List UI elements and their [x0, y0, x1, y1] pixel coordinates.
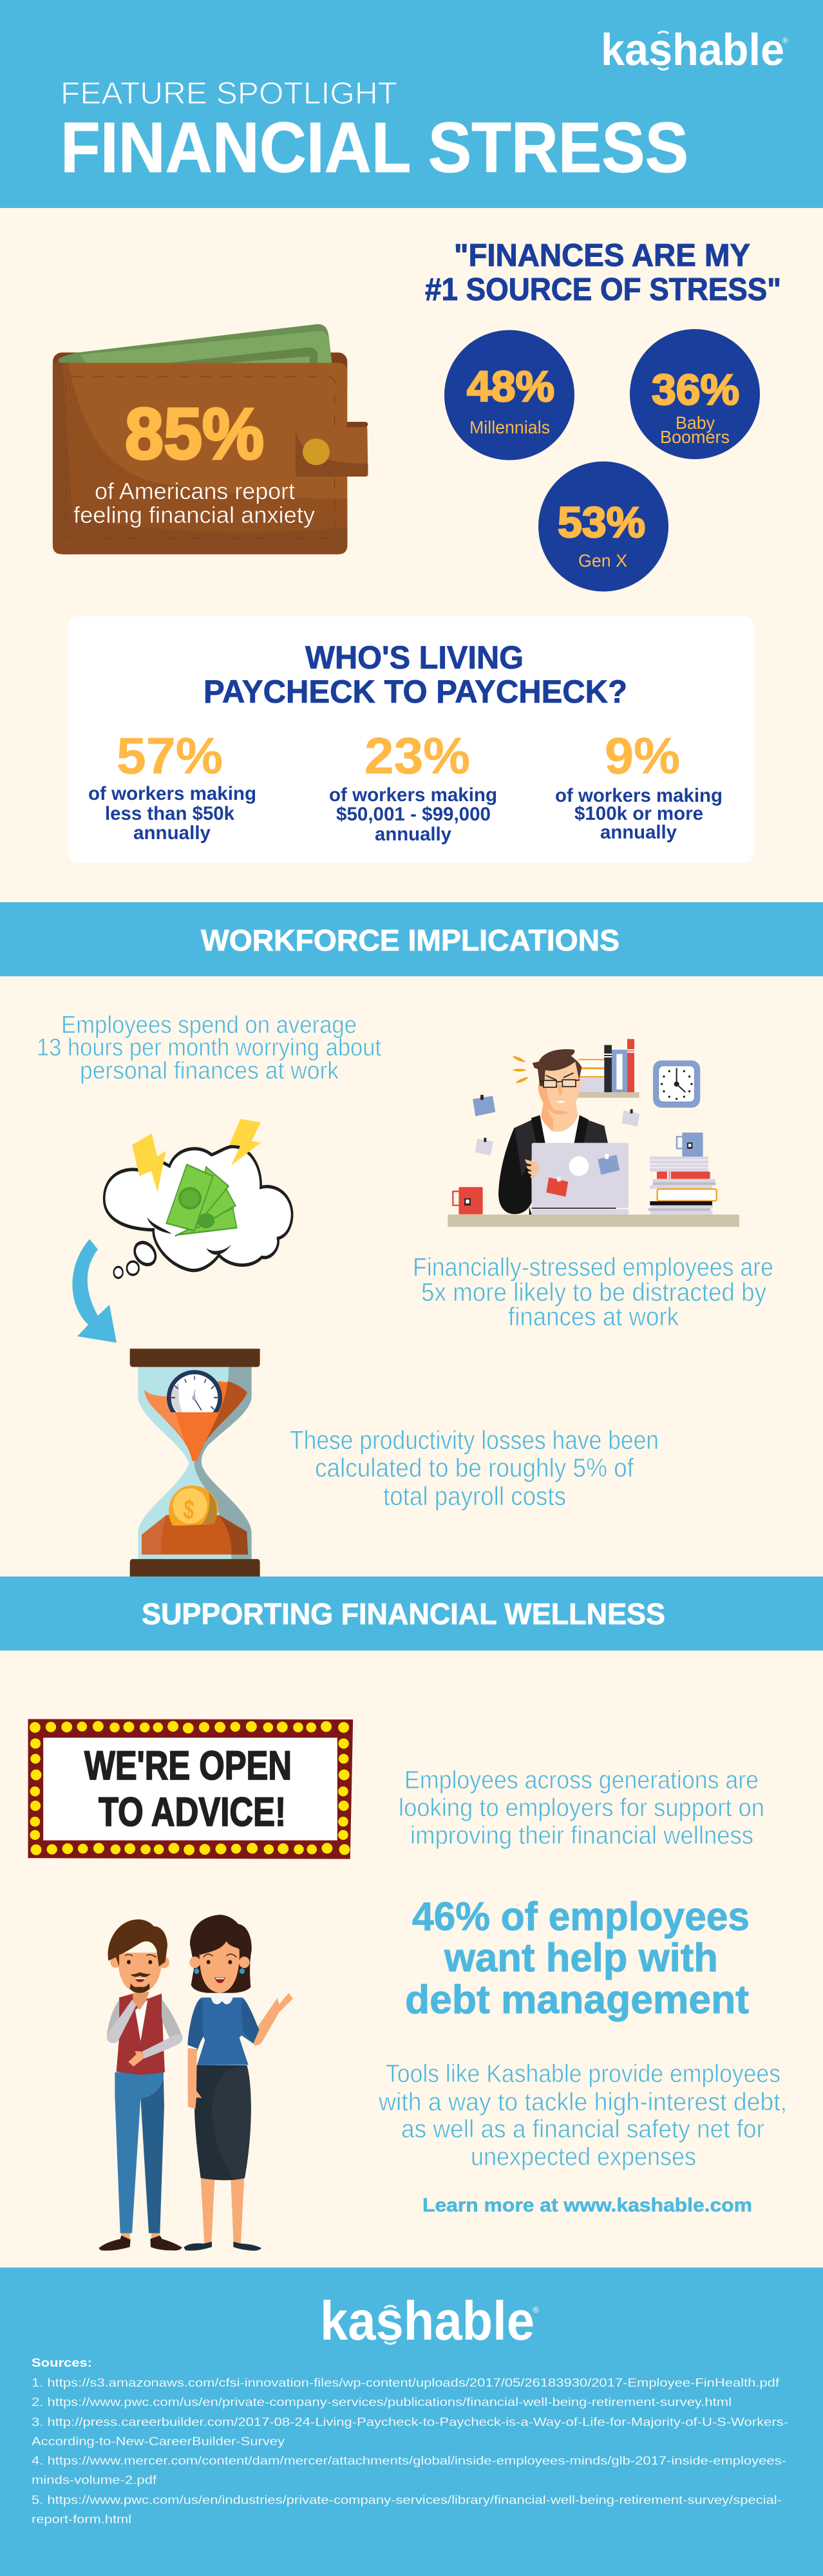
sources list: According-to-New-CareerBuilder-Survey [32, 2434, 285, 2448]
stat column: 9%: annually [600, 822, 677, 843]
text: 13 hours per month: 13 hours per month worrying about [37, 1034, 381, 1061]
circle: baby boomers 36%: Boomers [660, 427, 730, 447]
sources list: 3. http://press.careerbuilder.com/2017-08-24-Living-Paycheck-to-Paycheck-is-a-Way-of-Life-for-Majority-of-U-S-Workers- [32, 2415, 788, 2429]
stopwatch dial [167, 1370, 222, 1412]
panel heading: PAYCHECK TO PAYCHECK? [203, 674, 627, 710]
red mug [453, 1187, 483, 1215]
kicker: feature spotlight: FEATURE SPOTLIGHT [61, 77, 397, 111]
text: tools like kashable [378, 2060, 787, 2171]
text: productivity losses: These productivity losses have been [290, 1425, 659, 1455]
text: productivity losses: calculated to be roughly 5% of [315, 1453, 634, 1482]
stat column: 57%: annually [133, 822, 211, 844]
callout: 46% want help with debt management [405, 1895, 750, 2022]
stat column: 57%: 57% [117, 727, 223, 784]
circle: millennials 48%: 48% [467, 363, 554, 411]
text: 13 hours per month [37, 1012, 381, 1084]
stress marks [512, 1056, 529, 1083]
caption: Americans report anxiety [73, 478, 315, 528]
circle: millennials 48% [444, 330, 574, 460]
circle: gen x 53% [538, 461, 668, 591]
wall clock [653, 1061, 700, 1108]
stat column: 9%: 9% [605, 727, 680, 784]
lightning bolts [132, 1119, 261, 1192]
heading: finances are my #1 source of stress: "FINANCES ARE MY [454, 238, 750, 273]
text: 13 hours per month: personal finances at work [80, 1057, 339, 1084]
text: productivity losses [290, 1425, 659, 1511]
gold coin [169, 1486, 218, 1526]
callout: 46% want help with debt management: want help with [444, 1936, 718, 1980]
circle: gen x 53%: Gen X [578, 551, 627, 571]
text: tools like kashable: Tools like Kashable provide employees [386, 2060, 780, 2088]
logo: kashable: ® [782, 36, 788, 45]
sources list: 5. https://www.pwc.com/us/en/industries/private-company-services/library/financial-well-being-retirement-survey/special- [32, 2493, 782, 2506]
illustration: thought cloud with money [104, 1119, 292, 1278]
heading: finances are my #1 source of stress: #1 SOURCE OF STRESS" [425, 272, 781, 307]
stat: 85%: 85% [125, 393, 264, 474]
stat column: 23%: of workers making [329, 784, 497, 806]
circle: baby boomers 36%: 36% [652, 366, 739, 414]
panel heading: WHO'S LIVING [305, 639, 524, 676]
arrow: thought to hourglass [72, 1239, 117, 1343]
footer logo: kashable [320, 2291, 534, 2352]
sources list: Sources: [32, 2356, 92, 2369]
heading: finances are my #1 source of stress [425, 238, 781, 307]
illustration: man and woman [99, 1915, 293, 2251]
text: tools like kashable: unexpected expenses [471, 2143, 696, 2171]
text: tools like kashable: as well as a financial safety net for [401, 2116, 764, 2143]
banknotes [166, 1164, 237, 1236]
text: employees across generations: Employees across generations are [404, 1766, 759, 1794]
caption: Americans report anxiety: of Americans report [95, 478, 295, 504]
circle: millennials 48%: Millennials [469, 417, 550, 437]
sign text [84, 1743, 292, 1835]
sources list: minds-volume-2.pdf [32, 2473, 157, 2486]
text: 5x more likely distracted [413, 1253, 773, 1331]
circle: baby boomers 36%: Baby [676, 413, 715, 433]
gold coin: $ [182, 1493, 196, 1526]
illustration: stressed employee at desk [448, 1039, 739, 1227]
stat column: 9%: of workers making [555, 785, 723, 806]
stat column: 57% [88, 727, 256, 844]
footer logo: ® [533, 2305, 539, 2315]
header banner [0, 0, 823, 208]
woman [184, 1915, 293, 2251]
marquee sign: we're open to advice [28, 1719, 353, 1859]
text: 13 hours per month: Employees spend on average [61, 1012, 357, 1039]
book stack [648, 1157, 717, 1215]
sign text: WE'RE OPEN [84, 1743, 292, 1788]
stat column: 23%: 23% [364, 727, 470, 784]
circle: gen x 53%: 53% [558, 498, 645, 547]
man [99, 1919, 182, 2251]
caption: Americans report anxiety: feeling financial anxiety [73, 502, 315, 528]
stat column: 57%: of workers making [88, 783, 256, 804]
sand pile [142, 1515, 248, 1555]
text: employees across generations [399, 1766, 764, 1850]
sources list [32, 2356, 788, 2526]
sources list: report-form.html [32, 2512, 131, 2526]
stat column: 23%: $50,001 - $99,000 [336, 804, 491, 825]
stat column: 9%: $100k or more [574, 803, 703, 824]
circle: baby boomers 36% [630, 329, 760, 459]
sticky notes [473, 1095, 639, 1155]
sources list: 2. https://www.pwc.com/us/en/private-company-services/publications/financial-well-being-retirement-survey.html [32, 2395, 732, 2409]
footer panel [0, 2268, 823, 2576]
text: 5x more likely distracted: 5x more likely to be distracted by [421, 1278, 766, 1307]
text: 5x more likely distracted: Financially-stressed employees are [413, 1253, 773, 1282]
text: tools like kashable: with a way to tackle high-interest debt, [378, 2088, 787, 2116]
sources list: 4. https://www.mercer.com/content/dam/mercer/attachments/global/inside-employees-minds/glb-2017-inside-employees- [32, 2454, 786, 2467]
man [498, 1049, 608, 1215]
text: employees across generations: looking to employers for support on [399, 1794, 764, 1822]
sources list: 1. https://s3.amazonaws.com/cfsi-innovation-files/wp-content/uploads/2017/05/26183930/2017-Employee-FinHealth.pdf [32, 2376, 780, 2389]
hourglass frames [130, 1349, 260, 1367]
section band: workforce implications: WORKFORCE IMPLICATIONS [201, 923, 620, 957]
illustration: hourglass [130, 1349, 260, 1577]
callout: 46% want help with debt management: 46% of employees [412, 1895, 750, 1939]
logo: kashable: kashable [601, 24, 784, 75]
panel heading [203, 639, 627, 710]
stat column: 9% [555, 727, 723, 843]
blue mug [677, 1133, 703, 1157]
section band: supporting financial wellness: SUPPORTING FINANCIAL WELLNESS [142, 1597, 665, 1631]
text: productivity losses: total payroll costs [383, 1481, 566, 1511]
stat column: 23% [329, 727, 497, 845]
section band: supporting financial wellness [0, 1577, 823, 1651]
callout: 46% want help with debt management: debt management [405, 1978, 749, 2022]
text: 5x more likely distracted: finances at work [508, 1303, 679, 1331]
link text: learn more: Learn more at www.kashable.com [422, 2195, 752, 2216]
stat column: 23%: annually [375, 824, 451, 845]
laptop [525, 1143, 629, 1215]
section band: workforce implications [0, 902, 823, 976]
icon: wallet with 85% stat [53, 324, 368, 554]
title: financial stress: FINANCIAL STRESS [61, 108, 688, 187]
panel: who's living paycheck to paycheck [68, 616, 754, 863]
sign text: TO ADVICE! [99, 1790, 286, 1835]
stat column: 57%: less than $50k [105, 803, 234, 824]
text: employees across generations: improving their financial wellness [410, 1822, 753, 1850]
